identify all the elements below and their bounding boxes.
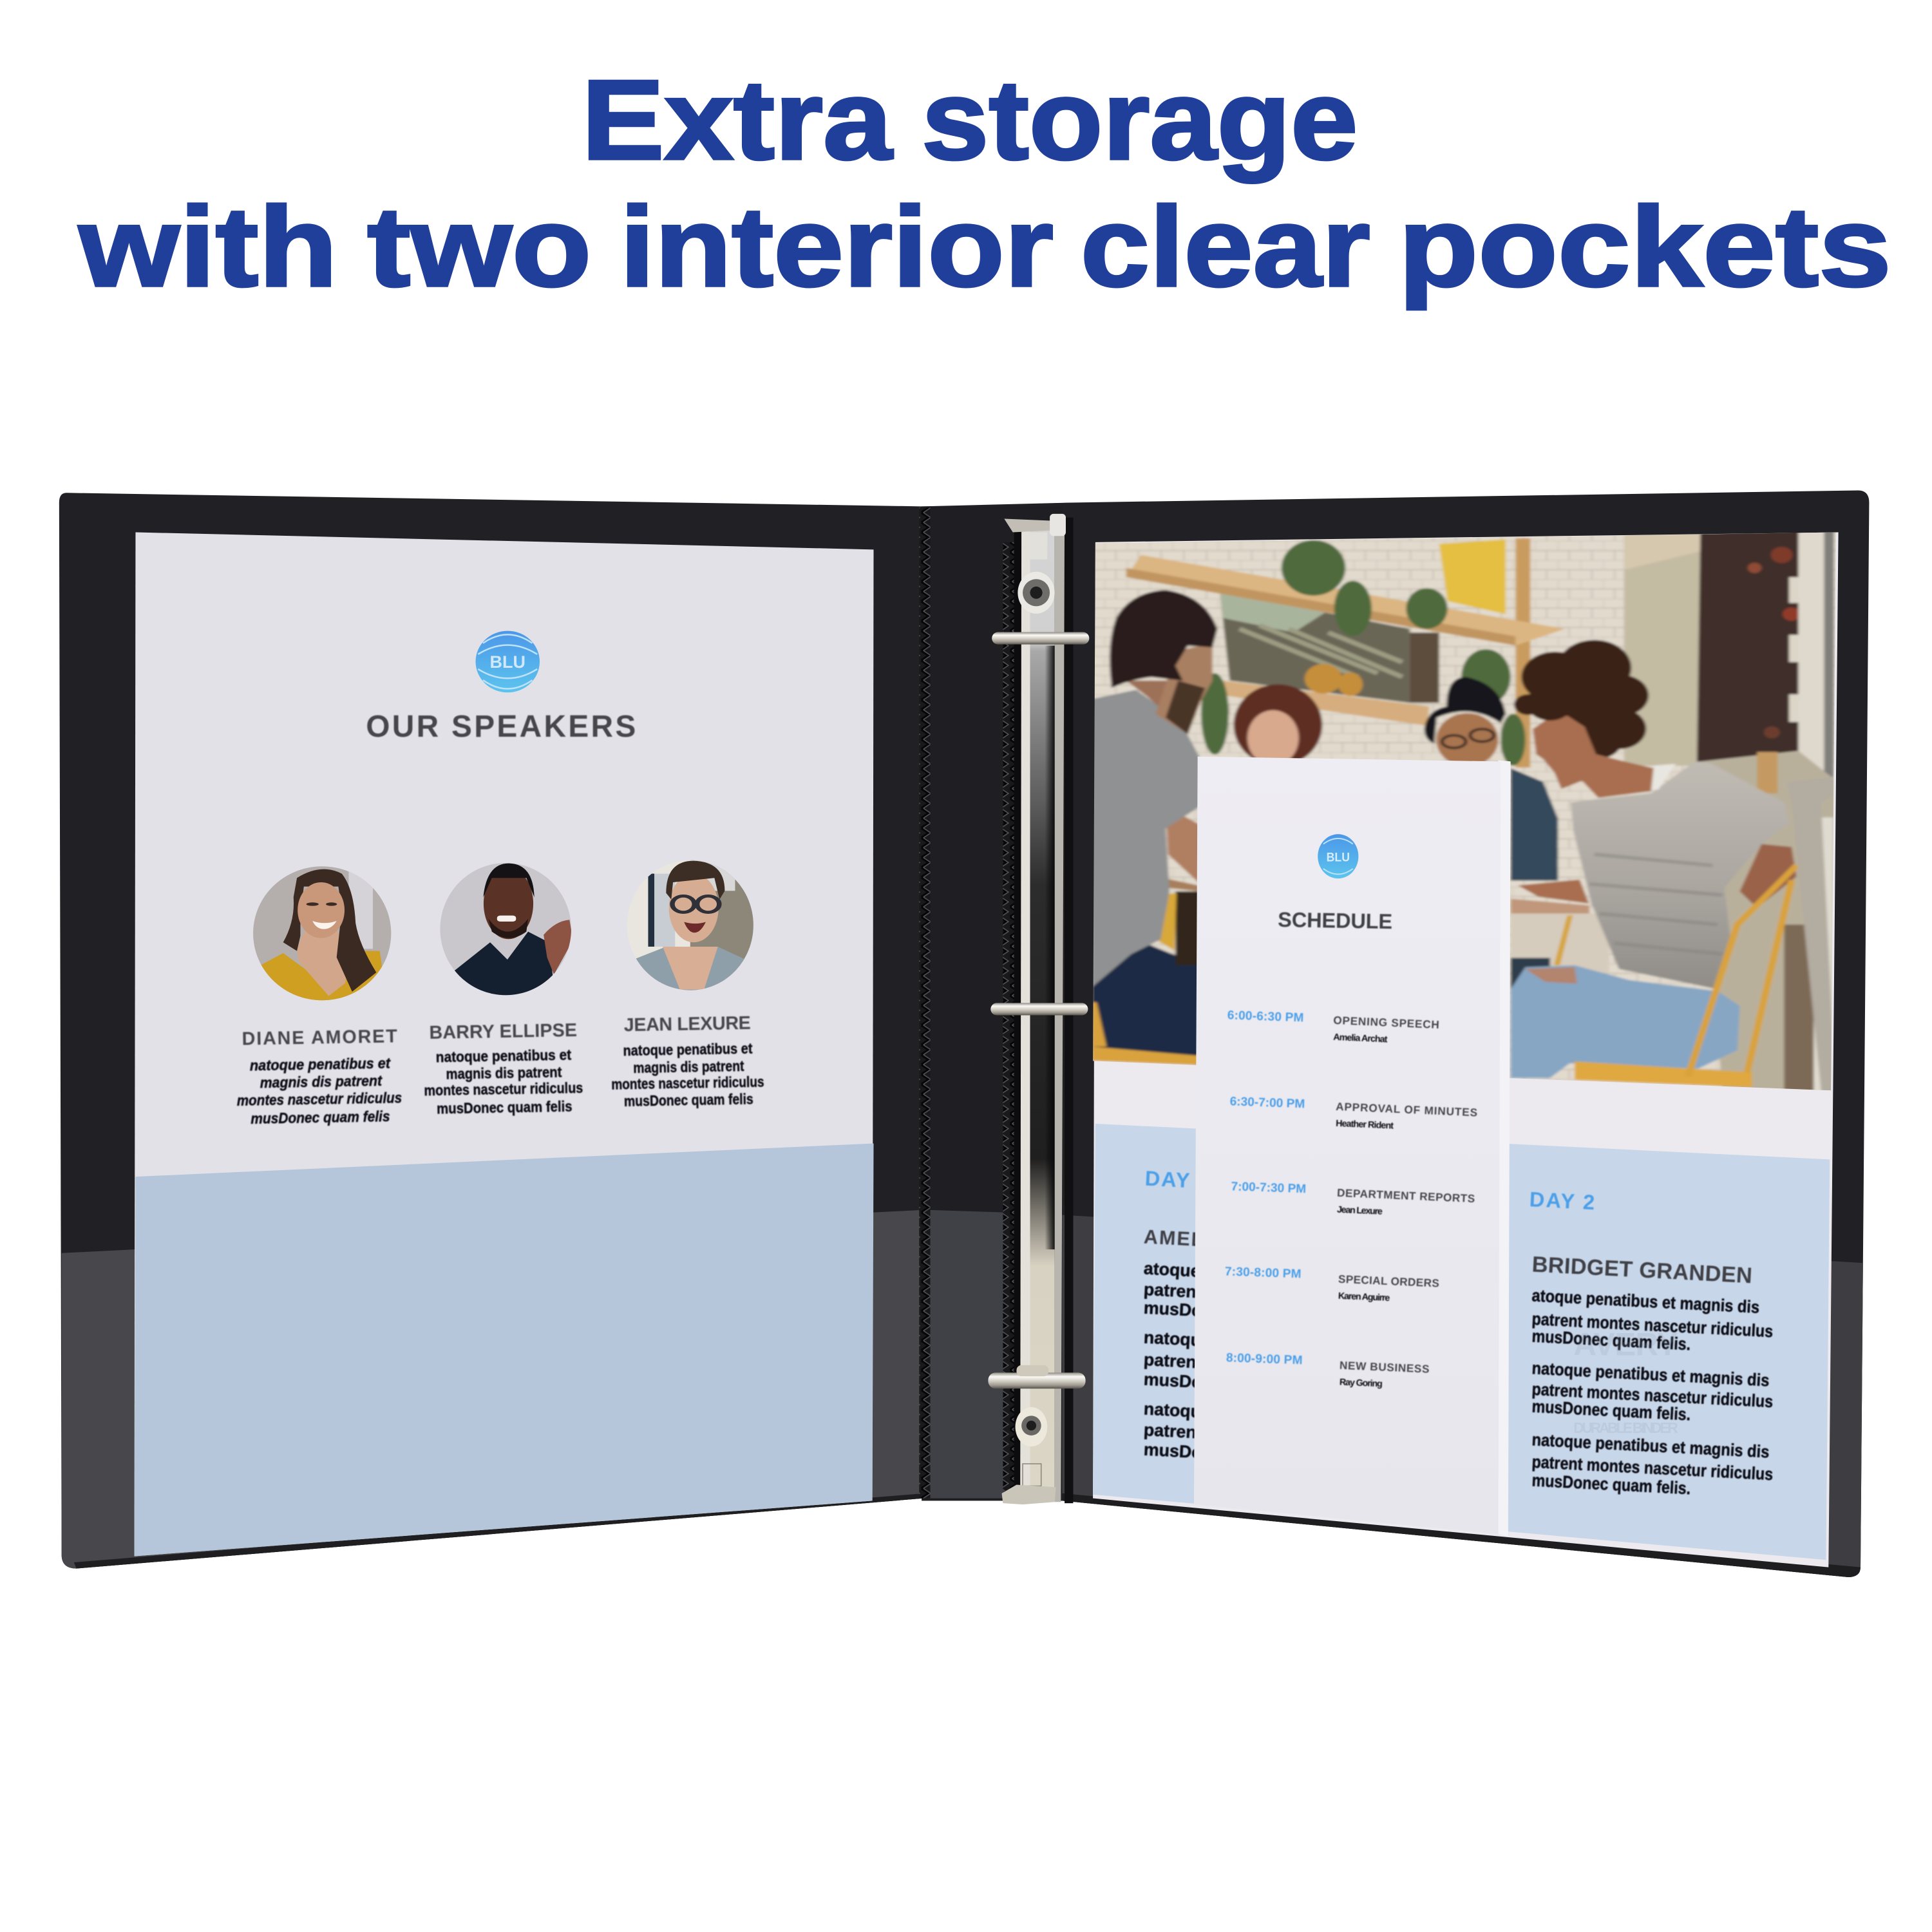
center woman bbox=[1234, 685, 1322, 766]
speaker: Jean Lexure: montes nascetur ridiculus bbox=[611, 1073, 764, 1093]
day 2 column: musDonec quam felis. bbox=[1531, 1470, 1691, 1498]
day 2 column: musDonec quam felis. bbox=[1531, 1397, 1691, 1425]
hair bbox=[1521, 640, 1649, 759]
schedule row: new business: 8:00-9:00 PM bbox=[1226, 1351, 1303, 1367]
title: clear bbox=[1081, 184, 1370, 310]
day 2 column: BRIDGET GRANDEN bbox=[1531, 1253, 1753, 1288]
schedule row: new business: NEW BUSINESS bbox=[1340, 1359, 1430, 1376]
left sheet bbox=[135, 533, 874, 1556]
logo: BLU bbox=[476, 631, 540, 692]
right post bbox=[1786, 777, 1836, 1091]
schedule row: opening speech: Amelia Archat bbox=[1333, 1032, 1388, 1045]
schedule row: opening speech: 6:00-6:30 PM bbox=[1227, 1009, 1304, 1025]
yellow box bbox=[1439, 540, 1506, 614]
day 1 column: DAY 1 bbox=[1144, 1167, 1211, 1193]
rail slot bbox=[1023, 1464, 1041, 1486]
schedule row: new business bbox=[1226, 1351, 1430, 1389]
speaker: Barry Ellipse: magnis dis patrent bbox=[446, 1064, 562, 1083]
logo: BLU: BLU bbox=[490, 652, 526, 672]
left cover bottom edge bbox=[74, 1493, 924, 1569]
day 1 column: atoque penatibus bbox=[1143, 1258, 1287, 1285]
schedule row: department reports: Jean Lexure bbox=[1337, 1205, 1383, 1217]
rivet: top bbox=[1018, 572, 1055, 614]
right column bbox=[1799, 531, 1834, 782]
day 1 column bbox=[1143, 1167, 1321, 1466]
day 1 column: AMELIA ARCHAT bbox=[1143, 1226, 1321, 1257]
rail centre bbox=[1030, 524, 1055, 1501]
speaker: Jean Lexure bbox=[610, 1012, 764, 1110]
speaker: Barry Ellipse: montes nascetur ridiculus bbox=[424, 1079, 583, 1099]
speaker: Barry Ellipse: BARRY ELLIPSE bbox=[429, 1020, 577, 1043]
rail stitching bbox=[1003, 542, 1014, 1491]
schedule row: special orders: Karen Aguirre bbox=[1338, 1291, 1390, 1303]
day 2 column: patrent montes nascetur ridiculus bbox=[1531, 1309, 1774, 1341]
speaker: Diane Amoret bbox=[236, 1026, 402, 1127]
speaker: Diane Amoret: natoque penatibus et bbox=[250, 1055, 391, 1074]
pastries bbox=[1305, 664, 1342, 694]
schedule row: opening speech: OPENING SPEECH bbox=[1333, 1014, 1439, 1031]
schedule row: new business: Ray Goring bbox=[1340, 1378, 1383, 1389]
day 1 column: patrent montes bbox=[1143, 1420, 1269, 1446]
heading: SCHEDULE bbox=[1278, 908, 1392, 933]
right sheet bbox=[1082, 522, 1855, 1567]
binder cover bbox=[59, 490, 1869, 1577]
photo bbox=[1082, 522, 1855, 1101]
title: two bbox=[367, 184, 591, 310]
title: interior bbox=[620, 184, 1054, 310]
ring: top bbox=[992, 632, 1089, 645]
day 2 column: musDonec quam felis. bbox=[1531, 1327, 1691, 1354]
schedule row: special orders: SPECIAL ORDERS bbox=[1338, 1273, 1439, 1290]
sheet background bbox=[135, 533, 874, 1556]
ring: middle bbox=[990, 1003, 1088, 1016]
logo: BLU bbox=[1318, 834, 1358, 878]
heading: OUR SPEAKERS bbox=[366, 710, 636, 744]
portrait: Jean Lexure bbox=[625, 858, 756, 992]
speaker: Diane Amoret: montes nascetur ridiculus bbox=[237, 1089, 402, 1109]
yellow chair bbox=[1575, 866, 1797, 1087]
table bbox=[1511, 899, 1609, 991]
title bbox=[78, 57, 1891, 310]
left stitching bbox=[919, 507, 931, 1499]
speaker: Jean Lexure: JEAN LEXURE bbox=[623, 1013, 751, 1036]
speaker: Diane Amoret: DIANE AMORET bbox=[242, 1026, 397, 1050]
ring: bottom bbox=[988, 1365, 1086, 1388]
window bricks bbox=[1789, 577, 1804, 722]
title: storage bbox=[922, 57, 1358, 184]
schedule row: department reports bbox=[1231, 1180, 1475, 1217]
portraits bbox=[249, 858, 756, 1005]
rail right strip bbox=[1055, 524, 1065, 1502]
right cover bottom edge bbox=[1062, 1493, 1861, 1577]
top cap bbox=[1004, 514, 1066, 560]
schedule insert bbox=[1194, 757, 1511, 1537]
day 2 column: patrent montes nascetur ridiculus bbox=[1531, 1452, 1774, 1484]
day 1 column: natoque penatibus bbox=[1143, 1327, 1297, 1355]
binder bbox=[59, 490, 1869, 1577]
hat man bbox=[1425, 677, 1558, 880]
day 2 column bbox=[1529, 1188, 1774, 1498]
speaker: Jean Lexure: magnis dis patrent bbox=[633, 1057, 744, 1076]
schedule row: approval of minutes: Heather Rident bbox=[1336, 1119, 1394, 1132]
dark window bbox=[1697, 531, 1799, 762]
speaker: Barry Ellipse bbox=[423, 1020, 583, 1117]
day 1 column: patrent montes bbox=[1143, 1350, 1269, 1376]
rail centre shading bbox=[1045, 646, 1055, 1249]
right interior pocket bbox=[1062, 1215, 1863, 1577]
day 2 column: natoque penatibus et magnis dis bbox=[1531, 1358, 1770, 1390]
schedule row: special orders bbox=[1225, 1265, 1439, 1303]
schedule row: department reports: DEPARTMENT REPORTS bbox=[1337, 1186, 1475, 1205]
rail left strip bbox=[1020, 524, 1030, 1497]
schedule row: approval of minutes: APPROVAL OF MINUTES bbox=[1336, 1100, 1477, 1119]
day 2 column: DAY 2 bbox=[1529, 1188, 1595, 1214]
left interior pocket bbox=[62, 1210, 924, 1569]
sheet background bbox=[1093, 533, 1839, 1567]
day 2 column: patrent montes nascetur ridiculus bbox=[1531, 1379, 1774, 1411]
lower shelf bbox=[1222, 681, 1429, 726]
rail backing bbox=[1014, 527, 1021, 1495]
rivet: bottom bbox=[1016, 1407, 1047, 1446]
photo background bbox=[1082, 522, 1855, 1101]
fringe bbox=[1514, 685, 1574, 721]
speaker: Barry Ellipse: musDonec quam felis bbox=[437, 1098, 573, 1117]
speaker: Barry Ellipse: natoque penatibus et bbox=[435, 1046, 572, 1065]
day 1 column: musDonec quam bbox=[1143, 1298, 1283, 1325]
schedule row: opening speech bbox=[1227, 1009, 1439, 1045]
schedule row: approval of minutes bbox=[1229, 1095, 1477, 1132]
bottom cap bbox=[1001, 1484, 1056, 1504]
speaker: Diane Amoret: magnis dis patrent bbox=[260, 1072, 383, 1091]
title: with bbox=[78, 184, 337, 310]
day 1 column: patrent montes bbox=[1143, 1280, 1269, 1305]
left man bbox=[1092, 590, 1217, 1065]
portrait: Diane Amoret bbox=[253, 866, 392, 1001]
day 2 column: atoque penatibus et magnis dis bbox=[1531, 1285, 1760, 1317]
speaker: Jean Lexure: musDonec quam felis bbox=[624, 1090, 753, 1110]
schedule row: department reports: 7:00-7:30 PM bbox=[1231, 1180, 1307, 1196]
speaker: Jean Lexure: natoque penatibus et bbox=[623, 1040, 753, 1059]
schedule row: special orders: 7:30-8:00 PM bbox=[1225, 1265, 1302, 1281]
speaker: Diane Amoret: musDonec quam felis bbox=[251, 1108, 390, 1127]
upper shelf bbox=[1126, 555, 1565, 645]
day 1 column: natoque penatibus bbox=[1143, 1399, 1297, 1426]
portrait: Barry Ellipse bbox=[439, 862, 576, 1000]
day 1 column: musDonec quam bbox=[1143, 1440, 1283, 1466]
plants bbox=[1201, 540, 1526, 766]
wall panels bbox=[1624, 551, 1700, 766]
insert front sheet bbox=[1194, 757, 1501, 1534]
day 1 column: musDonec quam bbox=[1143, 1370, 1283, 1396]
curly woman bbox=[1511, 640, 1797, 1078]
title: Extra bbox=[582, 57, 893, 184]
schedule row: approval of minutes: 6:30-7:00 PM bbox=[1229, 1095, 1305, 1111]
back window bbox=[1221, 611, 1412, 704]
insert back sheet bbox=[1499, 760, 1511, 1537]
title: pockets bbox=[1399, 184, 1891, 310]
rail shadow bbox=[1065, 518, 1073, 1503]
watermark: Avery binder label: AVERY bbox=[1573, 1327, 1678, 1363]
day 2 column: natoque penatibus et magnis dis bbox=[1531, 1430, 1770, 1462]
watermark: Avery binder label: DURABLE BINDER bbox=[1573, 1419, 1678, 1436]
wood post bbox=[1515, 538, 1530, 768]
watermark: Avery binder label bbox=[1573, 1327, 1678, 1436]
lower right background bbox=[1698, 751, 1836, 1098]
spine bbox=[922, 506, 1062, 1501]
blue band bbox=[135, 1144, 874, 1556]
logo: BLU: BLU bbox=[1327, 851, 1350, 864]
blue band bbox=[1093, 1124, 1830, 1560]
ring mechanism bbox=[988, 514, 1089, 1504]
spine pocket bbox=[931, 1210, 1004, 1499]
